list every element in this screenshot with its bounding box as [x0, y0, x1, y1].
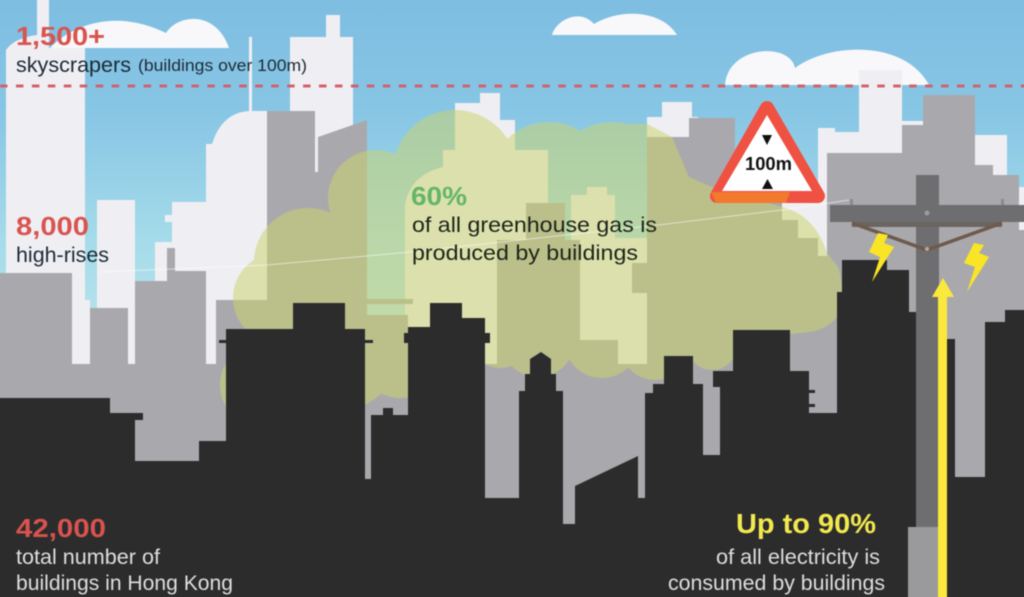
stat: high-rises: 8,000	[16, 211, 89, 241]
stat: total buildings: total number of	[16, 546, 160, 569]
100m height dashed line	[0, 84, 1024, 88]
icon: lightning bolt right	[964, 243, 989, 292]
stat: electricity: Up to 90%	[736, 508, 876, 539]
background grey buildings	[0, 95, 1024, 534]
stat: skyscrapers: (buildings over 100m)	[138, 56, 307, 75]
background white skyscrapers	[6, 0, 1024, 365]
sky background	[0, 0, 1024, 400]
annotation leader line	[100, 200, 849, 272]
stat: skyscrapers: skyscrapers	[16, 54, 131, 77]
utility pole	[830, 175, 1024, 597]
stat: electricity	[668, 508, 885, 595]
stat: skyscrapers: 1,500+	[16, 21, 105, 51]
warning sign: 100m: 100m	[745, 154, 792, 174]
clouds	[50, 14, 929, 85]
arrow: electricity rising	[932, 278, 954, 597]
stat: total buildings: 42,000	[16, 513, 106, 543]
stat: skyscrapers	[16, 21, 307, 77]
stat: electricity: consumed by buildings	[668, 572, 885, 595]
stat: electricity: of all electricity is	[716, 546, 880, 569]
foreground dark skyline	[0, 260, 1024, 597]
stat: greenhouse gas: 60%	[411, 181, 467, 211]
pollution cloud: greenhouse gas	[220, 110, 842, 427]
stat: total buildings	[16, 513, 233, 595]
icon: lightning bolt left	[869, 233, 894, 282]
stat: greenhouse gas: produced by buildings	[412, 242, 638, 265]
stat: high-rises	[16, 211, 109, 267]
stat: greenhouse gas	[411, 181, 657, 265]
stat: greenhouse gas: of all greenhouse gas is	[412, 214, 657, 237]
stat: total buildings: buildings in Hong Kong	[16, 572, 233, 595]
warning sign: 100m	[711, 108, 818, 203]
stat: high-rises: high-rises	[16, 244, 109, 267]
